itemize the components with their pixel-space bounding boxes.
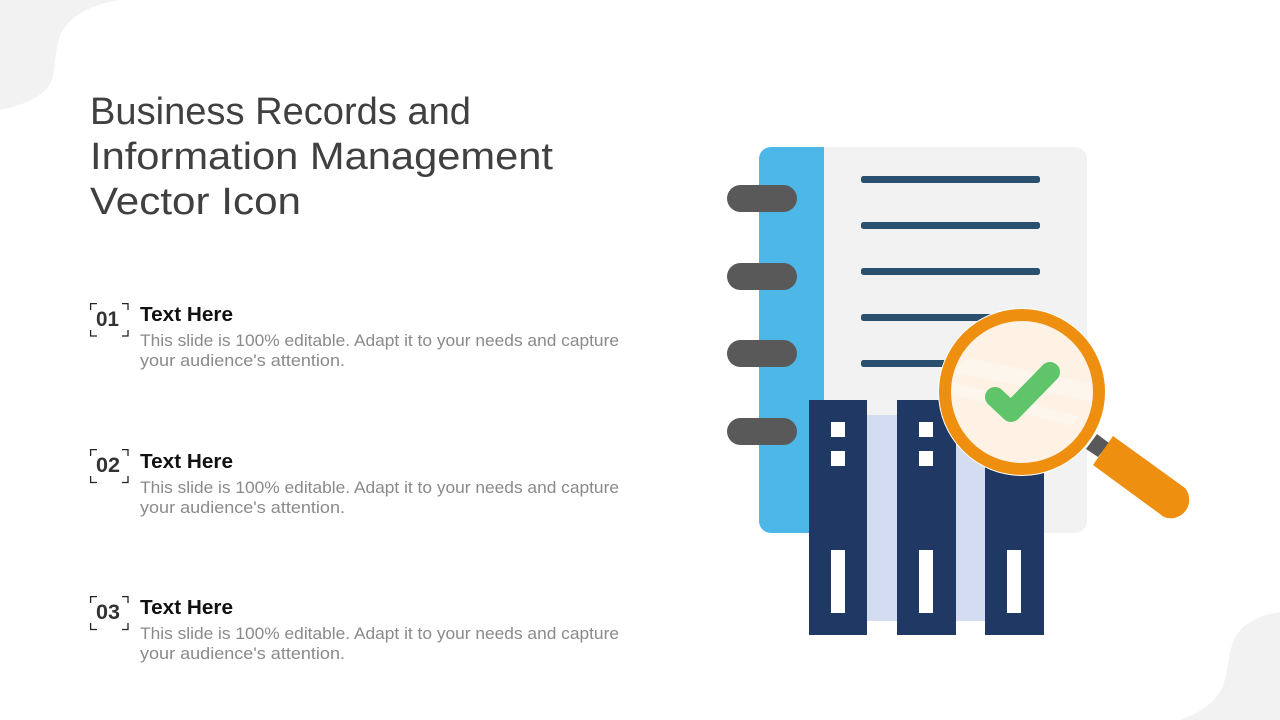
magnifying glass [938, 308, 1189, 518]
title [90, 91, 553, 223]
background blob: bottom right [1180, 612, 1280, 720]
title: Business Records and [90, 91, 471, 133]
body text 02: your audience's attention. [140, 499, 345, 517]
number badge 02: 02 [96, 454, 120, 477]
heading 03: Text Here [140, 597, 233, 619]
number badge 01 [91, 304, 128, 336]
magnifier handle [1093, 436, 1189, 518]
body text 03 [140, 625, 619, 663]
magnifier lens [938, 308, 1106, 476]
body text 01: This slide is 100% editable. Adapt it to your needs and capture [140, 332, 619, 350]
number badge 03: 03 [96, 601, 120, 624]
notebook page [824, 147, 1087, 533]
file backing [867, 415, 985, 621]
heading 02: Text Here [140, 451, 233, 473]
heading 01: Text Here [140, 304, 233, 326]
body text 01: your audience's attention. [140, 352, 345, 370]
check mark [995, 372, 1050, 412]
notebook spine [759, 147, 824, 533]
body text 02: This slide is 100% editable. Adapt it to your needs and capture [140, 479, 619, 497]
background blob: top left [0, 0, 120, 110]
item 02 [91, 450, 619, 517]
number badge 02 [91, 450, 128, 482]
title: Vector Icon [90, 181, 301, 223]
item 03 [91, 597, 619, 663]
magnifier neck [1086, 434, 1109, 457]
body text 03: This slide is 100% editable. Adapt it to your needs and capture [140, 625, 619, 643]
title: Information Management [90, 136, 553, 178]
body text 03: your audience's attention. [140, 645, 345, 663]
page text lines [861, 176, 1040, 367]
item 01 [91, 304, 619, 370]
icon: records illustration [727, 147, 1189, 635]
file binders [809, 400, 1044, 635]
notebook rings [727, 185, 797, 445]
body text 01 [140, 332, 619, 370]
body text 02 [140, 479, 619, 517]
number badge 01: 01 [96, 308, 119, 331]
number badge 03 [91, 597, 128, 630]
